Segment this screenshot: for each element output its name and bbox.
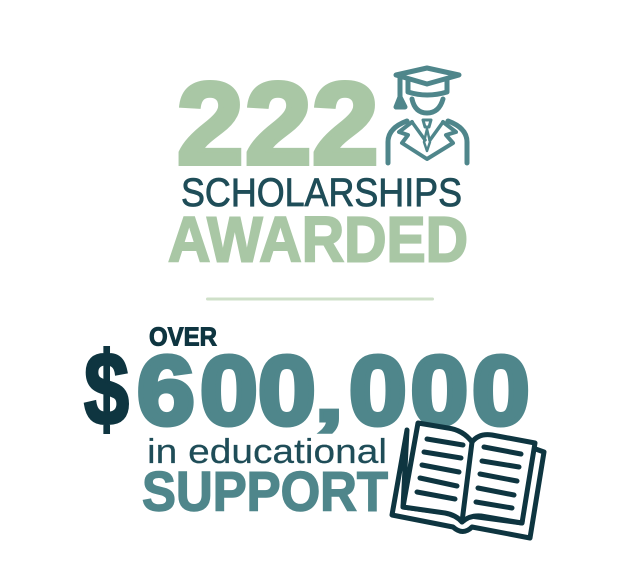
amount: 600,000 — [137, 337, 530, 445]
amount: 600,000: , — [314, 356, 344, 437]
icon: graduate — [388, 68, 467, 163]
heading: SUPPORT: SUPPORT — [142, 460, 388, 522]
dollar sign: $ — [84, 332, 129, 448]
divider — [206, 298, 434, 300]
label: OVER: OVER — [149, 322, 217, 352]
amount: 600,000: 000 — [349, 337, 530, 445]
heading: SCHOLARSHIPS: SCHOLARSHIPS — [181, 171, 462, 215]
text: in educational: in educational — [147, 433, 387, 471]
heading: 222: 222 — [177, 58, 378, 188]
heading: AWARDED: AWARDED — [168, 204, 468, 276]
icon: open book — [392, 423, 544, 538]
amount: 600,000: 600 — [137, 337, 316, 445]
